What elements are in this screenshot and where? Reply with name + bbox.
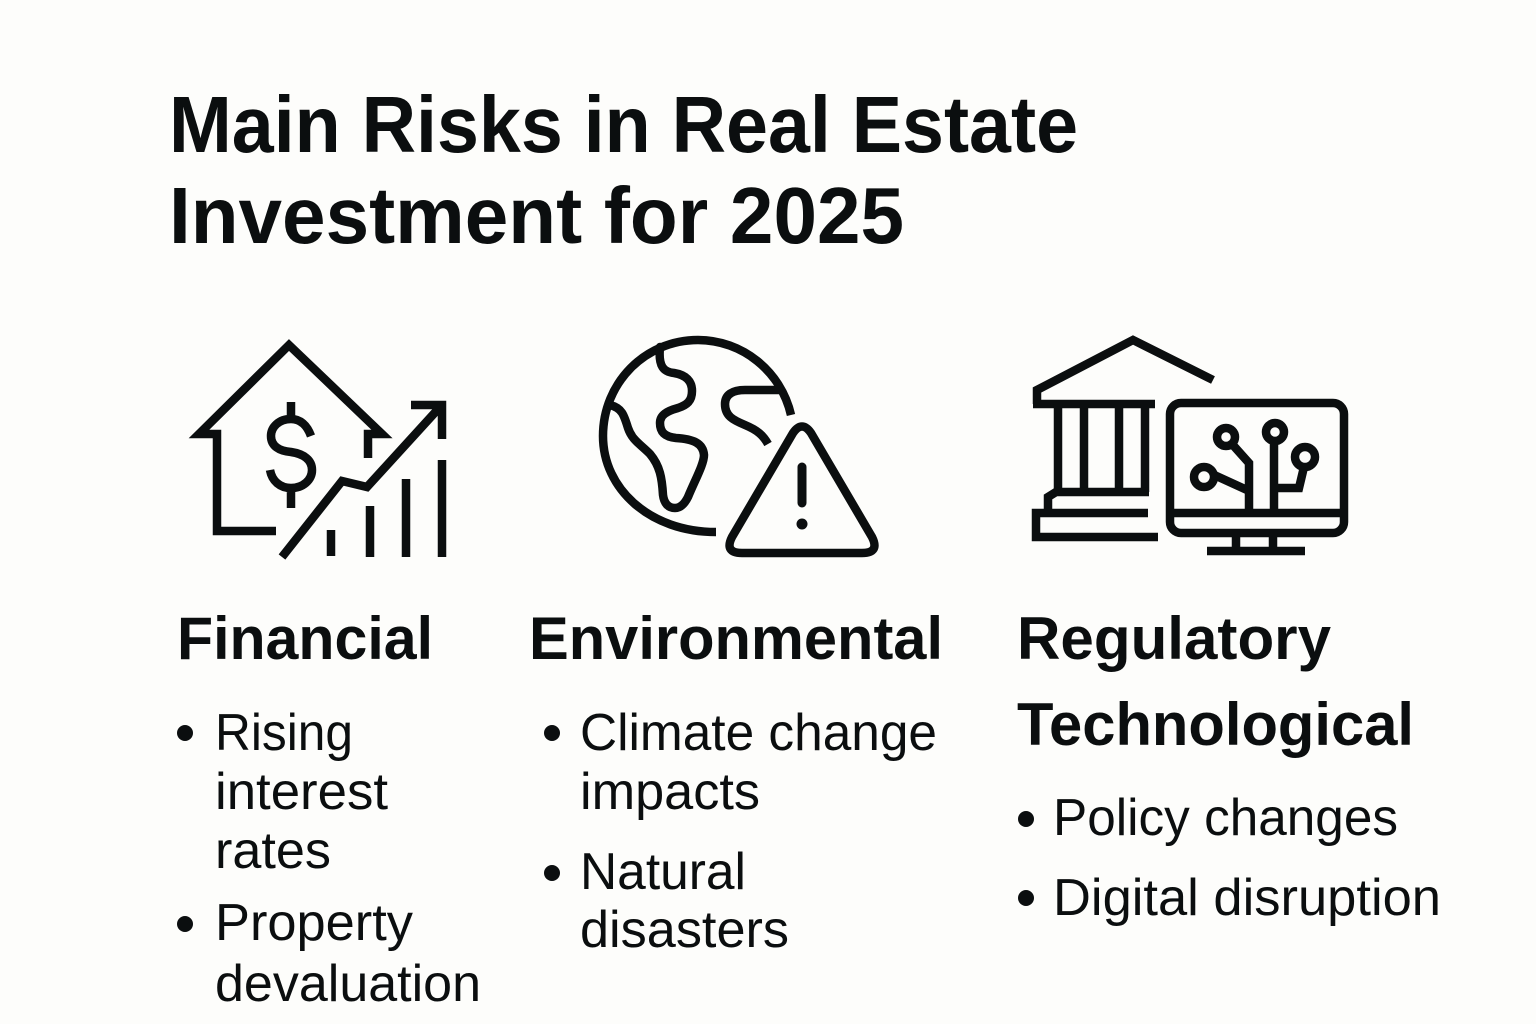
steps <box>1036 492 1158 537</box>
title <box>169 80 1078 260</box>
rising arrow <box>282 405 442 557</box>
continent left <box>610 347 704 508</box>
list: regulatory and technological risks: Digital disruption <box>1053 869 1441 927</box>
warning triangle <box>730 426 874 553</box>
list: financial risks: devaluation <box>215 955 481 1013</box>
circuit traces <box>1212 441 1304 513</box>
list: environmental risks <box>544 704 937 959</box>
icon: monitor with circuit <box>1170 403 1344 553</box>
exclamation mark <box>798 467 806 503</box>
list: regulatory and technological risks: Policy changes <box>1053 789 1398 847</box>
roof <box>1033 340 1213 404</box>
icon: house with dollar and rising chart <box>199 345 442 557</box>
columns <box>1058 404 1145 492</box>
screen <box>1170 403 1344 533</box>
list: financial risks: Property <box>215 894 413 952</box>
heading: Regulatory: Regulatory <box>1017 605 1332 672</box>
continent right <box>725 390 780 444</box>
list: financial risks: Rising <box>215 704 353 762</box>
title: Investment for 2025 <box>169 171 904 260</box>
list: financial risks <box>177 704 481 1013</box>
house outline <box>199 345 382 531</box>
circuit nodes <box>1217 428 1235 446</box>
dollar sign <box>270 402 312 508</box>
panel: financial <box>177 345 481 1013</box>
bars <box>331 460 442 557</box>
icon: globe with warning triangle <box>603 340 874 553</box>
heading: Financial: Financial <box>177 605 433 672</box>
icon: government building <box>1033 340 1213 537</box>
globe outline <box>603 340 791 532</box>
list: financial risks: interest <box>215 763 389 821</box>
list: financial risks: rates <box>215 822 331 880</box>
list: environmental risks: Natural <box>580 843 746 901</box>
title: Main Risks in Real Estate <box>169 80 1078 169</box>
list: environmental risks: Climate change <box>580 704 937 762</box>
panel: regulatory and technological <box>1017 340 1441 927</box>
heading: Environmental: Environmental <box>529 605 943 672</box>
list: environmental risks: impacts <box>580 763 760 821</box>
heading: Technological: Technological <box>1017 691 1414 758</box>
list: environmental risks: disasters <box>580 901 789 959</box>
list: regulatory and technological risks <box>1018 789 1441 927</box>
panel: environmental <box>529 340 943 959</box>
